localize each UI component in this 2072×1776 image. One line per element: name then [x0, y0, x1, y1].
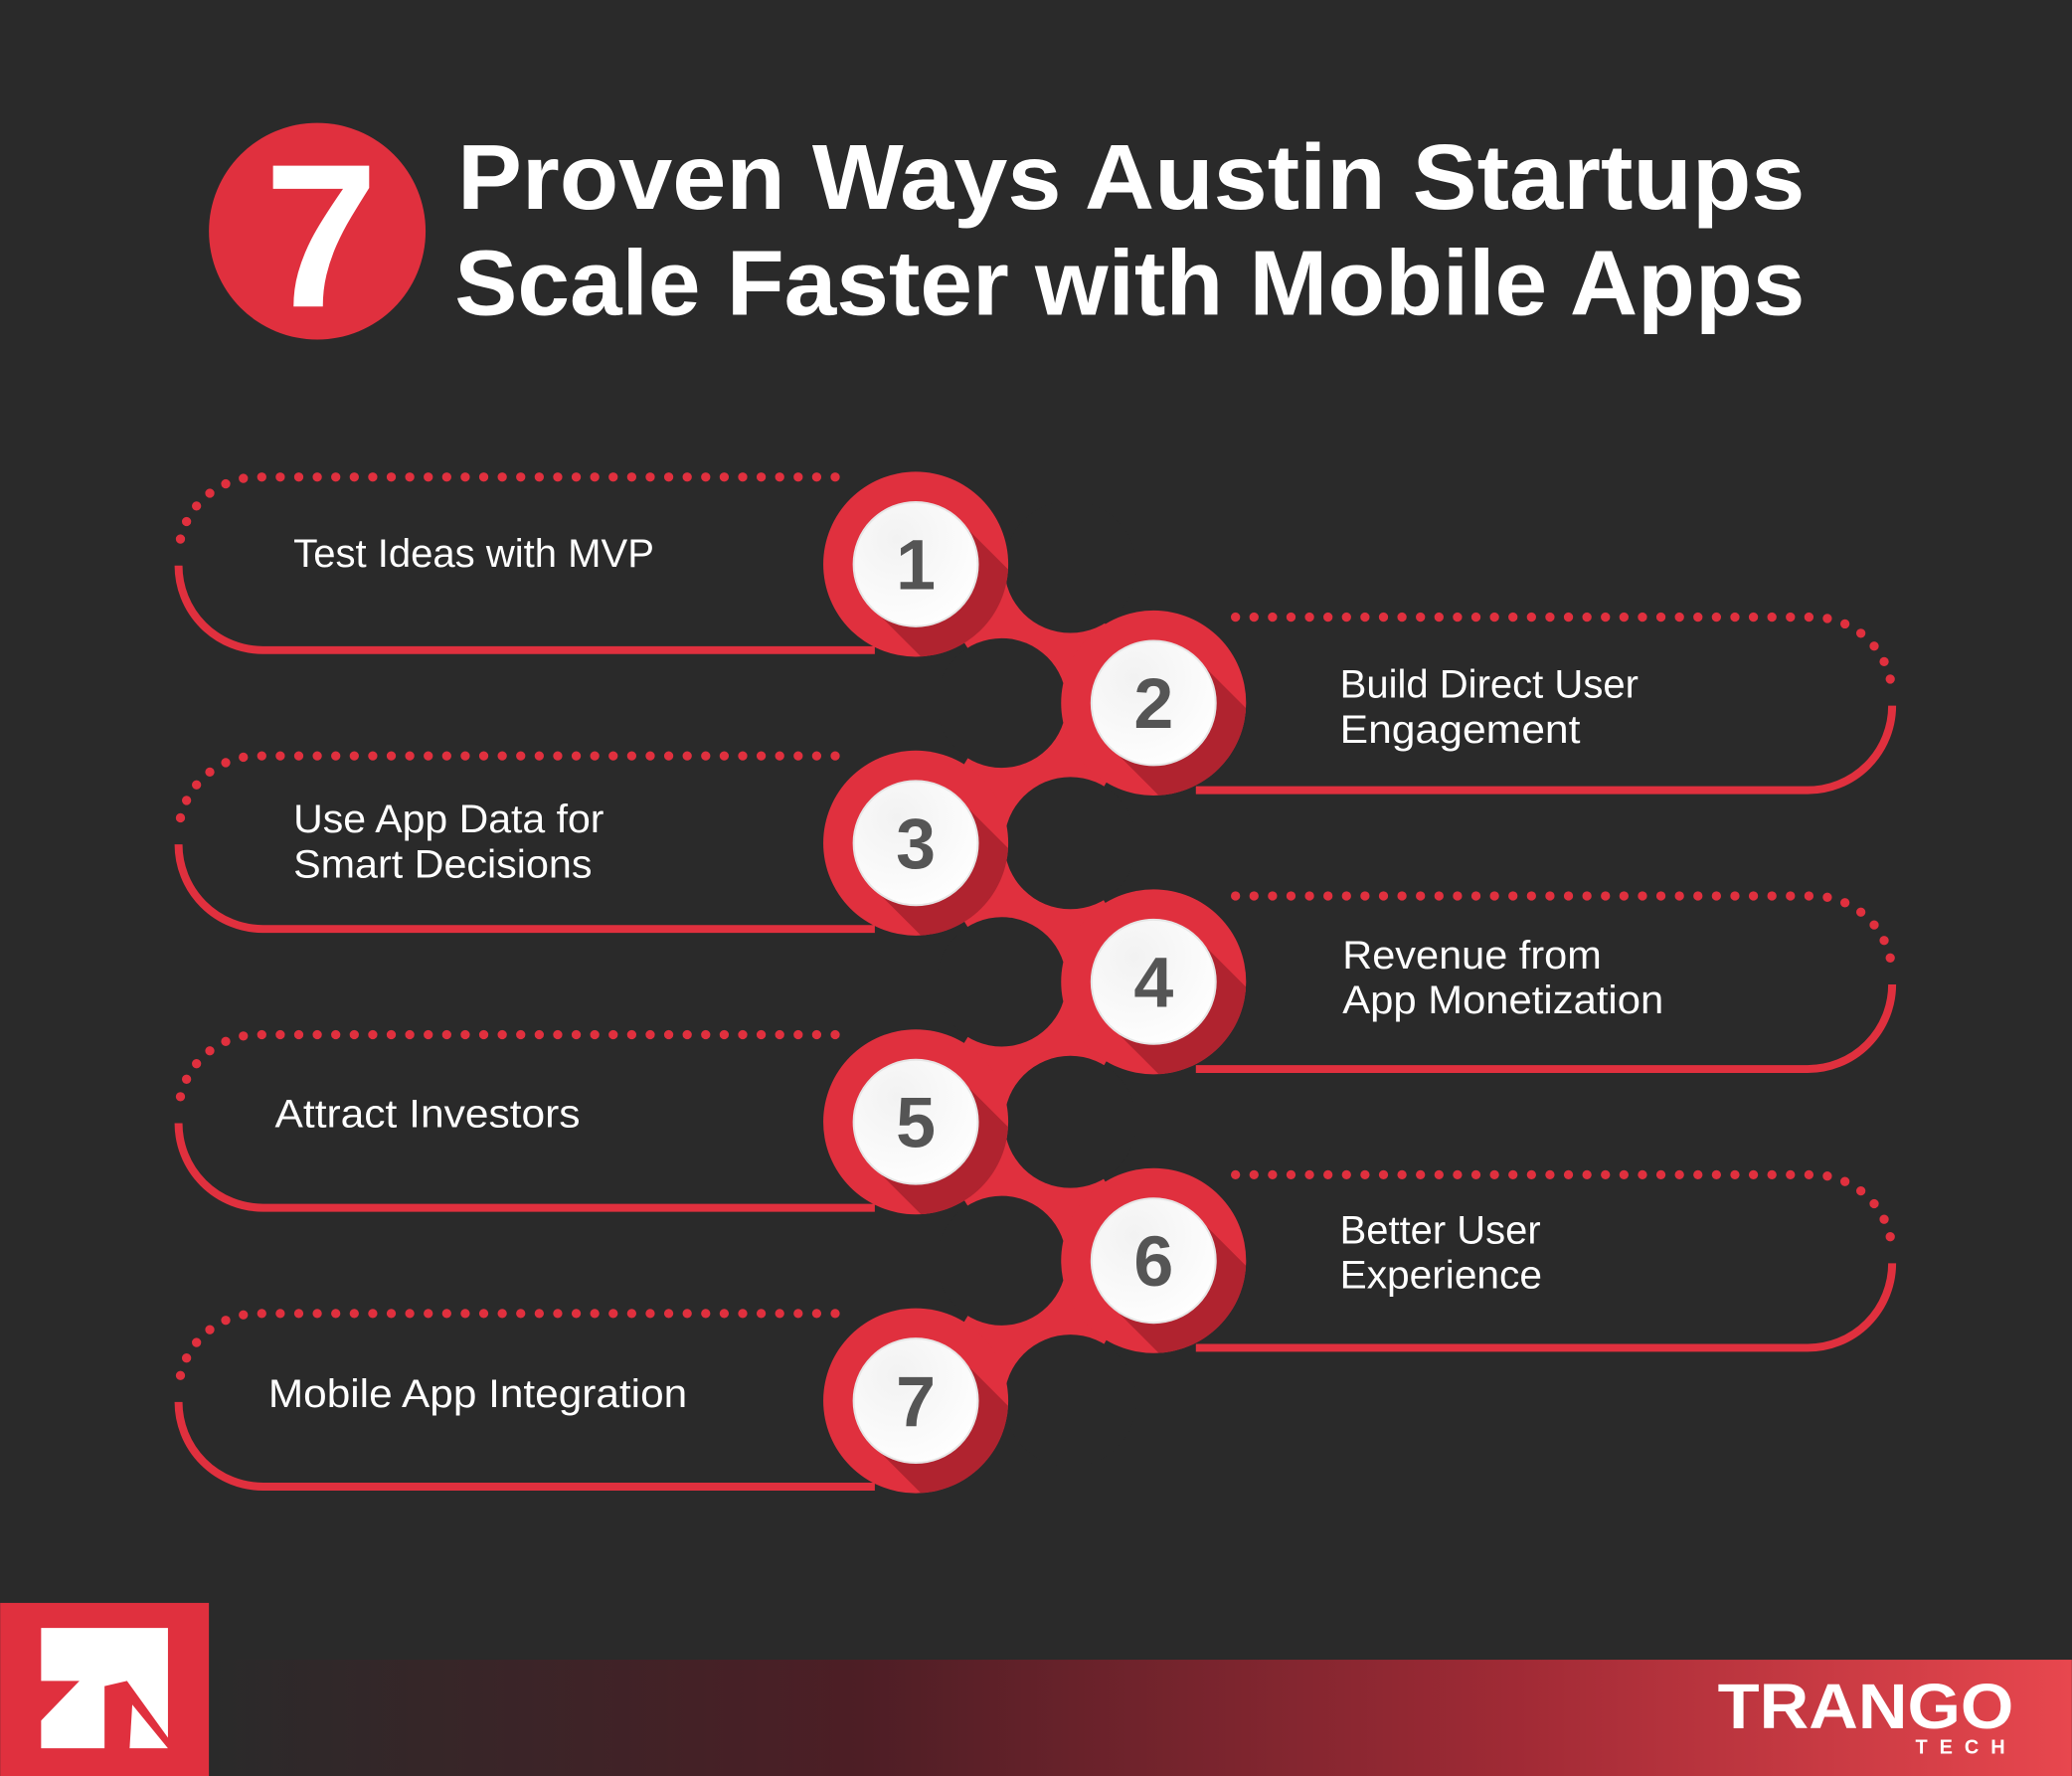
panel outlines — [179, 477, 1892, 1487]
item labels — [268, 532, 1663, 1416]
number 2: 2 — [1133, 664, 1173, 744]
item labels: App Monetization — [1342, 978, 1663, 1022]
item labels: Use App Data for — [293, 798, 604, 841]
item labels: Test Ideas with MVP — [293, 532, 654, 576]
number 5 — [823, 1029, 1008, 1215]
item labels: Build Direct User — [1340, 663, 1639, 707]
number 5: 5 — [896, 1083, 936, 1162]
item labels: Better User — [1340, 1208, 1541, 1252]
number 4: 4 — [1133, 944, 1173, 1023]
item labels: Smart Decisions — [293, 842, 593, 886]
number 6 — [1061, 1167, 1247, 1353]
item labels: Engagement — [1340, 708, 1580, 752]
number 4 — [1061, 889, 1247, 1074]
number 7: 7 — [896, 1362, 936, 1442]
item labels: Experience — [1340, 1254, 1542, 1298]
number 6: 6 — [1133, 1222, 1173, 1302]
title: Scale Faster with Mobile Apps — [454, 231, 1805, 334]
number 7 — [823, 1309, 1008, 1494]
logo icon — [0, 1603, 209, 1776]
number 3: 3 — [896, 804, 936, 884]
logo text: TRANGO — [1718, 1671, 2013, 1742]
number 1: 1 — [896, 526, 936, 606]
connector chain — [916, 501, 1153, 1467]
footer bar — [209, 1660, 2072, 1776]
title badge: 7 — [209, 121, 426, 350]
title — [454, 125, 1805, 334]
item labels: Mobile App Integration — [268, 1372, 687, 1416]
title badge: 7: 7 — [264, 121, 378, 350]
item labels: Attract Investors — [275, 1093, 581, 1137]
logo text: TECH — [1915, 1736, 2017, 1758]
title: Proven Ways Austin Startups — [457, 125, 1805, 229]
number 3 — [823, 750, 1008, 936]
number 1 — [823, 471, 1008, 656]
item labels: Revenue from — [1342, 934, 1602, 977]
number 2 — [1061, 611, 1247, 796]
